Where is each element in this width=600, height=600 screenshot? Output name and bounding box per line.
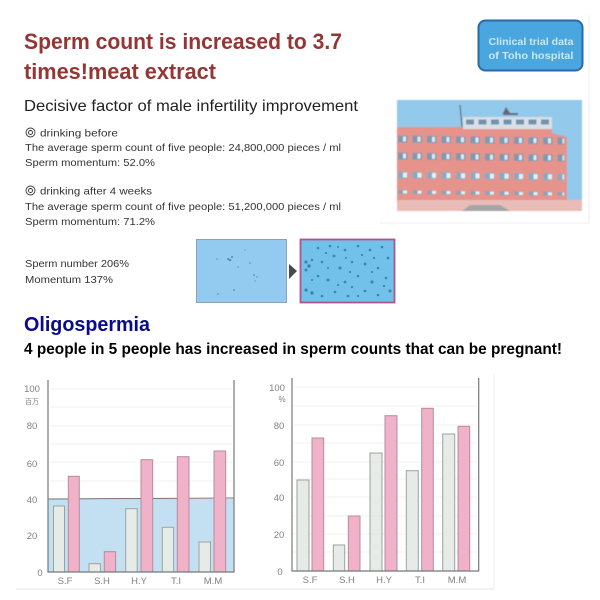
- x axis labels: M.M: [448, 575, 466, 586]
- text block: drinking before: drinking before: [40, 128, 118, 140]
- y axis labels: [269, 383, 286, 578]
- photo: hospital building: [397, 100, 582, 211]
- bar chart: sperm momentum: [269, 378, 479, 586]
- micrograph: after: [300, 240, 394, 302]
- text block: drinking before: [25, 128, 341, 169]
- badge: clinical trial data: of Toho hospital: [488, 50, 574, 62]
- bars: before drinking: [297, 434, 455, 571]
- title: times!meat extract: [24, 59, 217, 84]
- x axis labels: [58, 576, 222, 587]
- x axis labels: T.I: [415, 575, 425, 586]
- axes: [292, 378, 479, 571]
- bar chart: sperm count: [24, 380, 234, 587]
- micrograph: before: [196, 240, 286, 302]
- caption: sperm number and momentum: Sperm number 206%: [25, 258, 129, 270]
- y axis labels: 100: [24, 384, 40, 395]
- badge: clinical trial data: Clinical trial data: [488, 36, 574, 48]
- x axis labels: S.H: [339, 575, 355, 586]
- arrow: [289, 264, 297, 279]
- bars: after drinking: [68, 451, 226, 572]
- x axis labels: H.Y: [131, 576, 148, 587]
- x axis labels: T.I: [171, 576, 181, 587]
- heading: Oligospermia: Oligospermia: [24, 314, 151, 336]
- y axis labels: 80: [27, 421, 37, 432]
- y axis labels: 100: [269, 383, 285, 394]
- text block: drinking before: The average sperm count of five people: 24,800,000 pieces / ml: [25, 142, 341, 154]
- y axis labels: %: [278, 395, 286, 404]
- badge: clinical trial data: [478, 20, 582, 70]
- x axis labels: M.M: [204, 576, 222, 587]
- y axis labels: 0: [37, 568, 43, 579]
- text block: drinking after 4 weeks: The average sperm count of five people: 51,200,000 pieces / ml: [25, 201, 341, 213]
- text block: drinking after 4 weeks: Sperm momentum: 71.2%: [25, 216, 155, 228]
- title: Sperm count is increased to 3.7: [24, 29, 342, 54]
- axes: [48, 380, 234, 572]
- y axis labels: [24, 384, 43, 579]
- bars: after drinking: [312, 408, 470, 571]
- text block: drinking before: Sperm momentum: 52.0%: [25, 157, 155, 169]
- title: [24, 29, 342, 84]
- bars: before drinking: [54, 506, 210, 572]
- caption: sperm number and momentum: [25, 258, 129, 286]
- x axis labels: S.H: [94, 576, 110, 587]
- x axis labels: H.Y: [376, 575, 393, 586]
- y axis labels: 80: [274, 421, 284, 432]
- y axis labels: 20: [27, 531, 37, 542]
- y axis labels: 60: [274, 458, 284, 469]
- y axis labels: 60: [27, 459, 37, 470]
- y axis labels: 0: [277, 567, 283, 578]
- text block: drinking after 4 weeks: drinking after 4 weeks: [40, 186, 152, 198]
- y axis labels: 百万: [25, 398, 39, 406]
- y axis labels: 40: [274, 493, 284, 504]
- x axis labels: S.F: [303, 575, 318, 586]
- subtitle: Decisive factor of male infertility improvement: [24, 98, 359, 115]
- text block: drinking after 4 weeks: [25, 186, 341, 228]
- y axis labels: 20: [274, 530, 284, 541]
- subheading: 4 people in 5 people has increased in sperm counts that can be pregnant!: [24, 341, 562, 358]
- caption: sperm number and momentum: Momentum 137%: [25, 274, 113, 286]
- x axis labels: S.F: [58, 576, 73, 587]
- x axis labels: [303, 575, 466, 586]
- y axis labels: 40: [27, 495, 37, 506]
